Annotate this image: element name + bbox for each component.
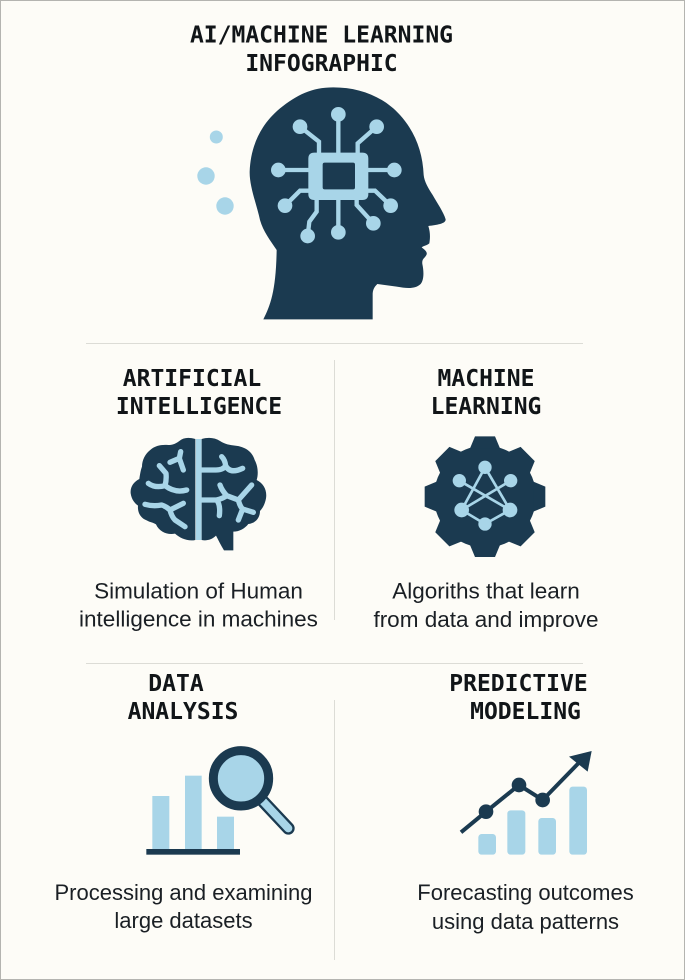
chip bbox=[308, 153, 368, 200]
magnifier lens bbox=[213, 751, 269, 806]
heading: data analysis bbox=[128, 671, 238, 725]
heading: predictive modeling bbox=[449, 671, 588, 725]
heading: predictive modeling: MODELING bbox=[470, 699, 581, 725]
icon: head with circuit chip bbox=[250, 87, 446, 319]
heading: artificial intelligence: INTELLIGENCE bbox=[116, 394, 282, 420]
icon: brain bbox=[131, 438, 266, 550]
text: ML description: Algoriths that learn bbox=[392, 578, 580, 604]
text: AI description: Simulation of Human bbox=[94, 578, 303, 604]
title bbox=[190, 23, 453, 77]
text: predictive modeling description: using data patterns bbox=[432, 909, 619, 934]
heading: data analysis: DATA bbox=[148, 671, 204, 697]
heading: machine learning: MACHINE bbox=[438, 366, 534, 392]
heading: artificial intelligence: ARTIFICIAL bbox=[123, 366, 261, 392]
text: ML description: from data and improve bbox=[373, 607, 599, 632]
text: data analysis description bbox=[54, 880, 313, 933]
heading: machine learning bbox=[431, 366, 541, 420]
text: AI description: intelligence in machines bbox=[79, 606, 318, 632]
text: AI description bbox=[79, 578, 318, 632]
text: ML description bbox=[373, 578, 599, 632]
text: data analysis description: Processing and examining bbox=[54, 880, 313, 905]
floating dots bbox=[197, 130, 234, 215]
text: data analysis description: large datasets bbox=[114, 908, 253, 933]
title: INFOGRAPHIC bbox=[245, 51, 398, 77]
magnifier handle bbox=[263, 802, 288, 828]
central divide bbox=[190, 439, 207, 540]
heading: data analysis: ANALYSIS bbox=[128, 699, 238, 725]
heading: machine learning: LEARNING bbox=[431, 394, 541, 420]
icon: bar chart with magnifier bbox=[146, 751, 288, 855]
heading: predictive modeling: PREDICTIVE bbox=[449, 671, 588, 697]
circuit nodes bbox=[271, 107, 402, 243]
circuit traces bbox=[278, 114, 394, 236]
head silhouette bbox=[250, 87, 446, 319]
heading: artificial intelligence bbox=[116, 366, 282, 420]
text: predictive modeling description: Forecasting outcomes bbox=[417, 880, 634, 905]
icon: gear with neural network bbox=[425, 436, 545, 557]
icon: rising trend chart bbox=[461, 751, 592, 855]
title: AI/MACHINE LEARNING bbox=[190, 23, 453, 49]
text: predictive modeling description bbox=[417, 880, 634, 934]
